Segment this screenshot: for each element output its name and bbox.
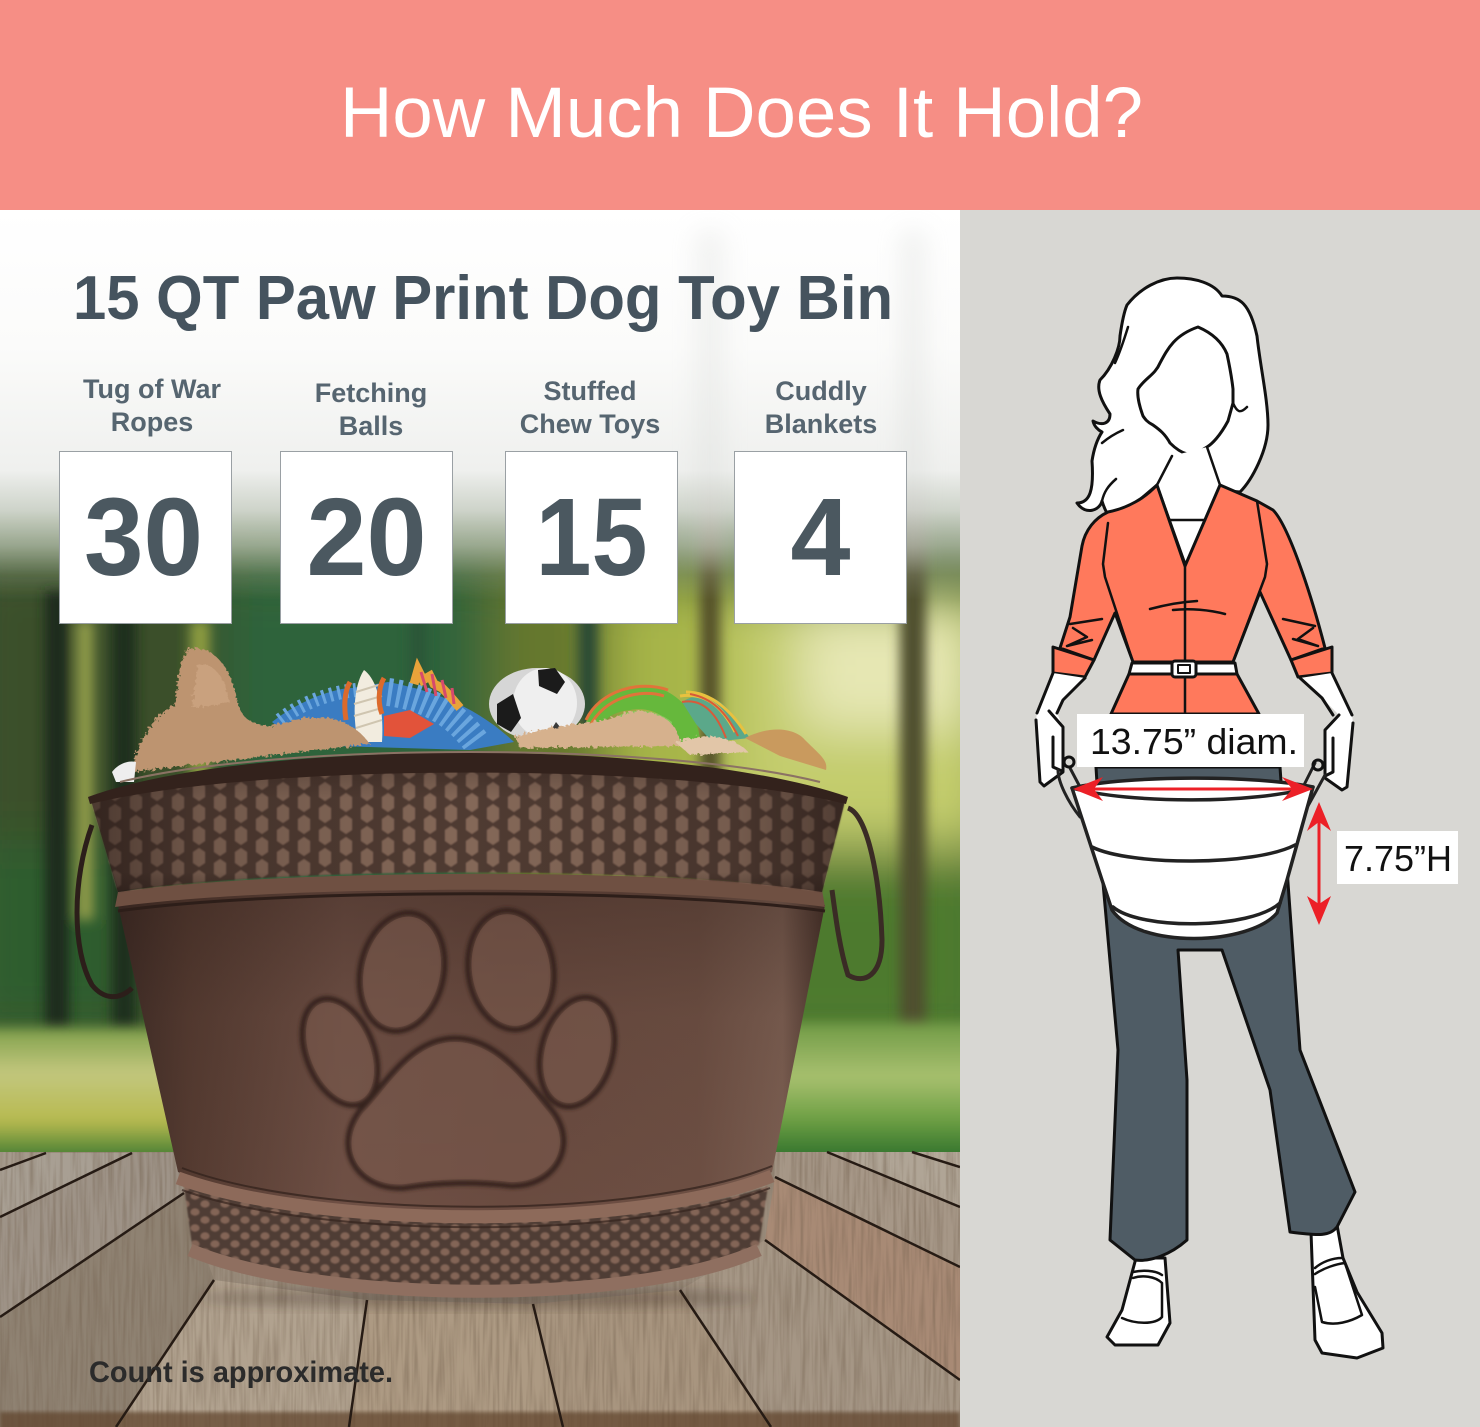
misty white fade [0,378,960,592]
bucket handle left [77,825,132,997]
count box: 20 [280,452,452,624]
label: 13.75 inch diameter [1077,714,1304,767]
heading: 15 QT Paw Print Dog Toy Bin: 15 QT Paw Print Dog Toy Bin [73,264,893,333]
face [1138,327,1233,454]
figure: woman holding bin [1036,278,1383,1358]
label: Cuddly Blankets: Blankets [765,409,877,439]
label: Tug of War Ropes: Ropes [111,407,193,437]
count box: 4: 4 [790,476,850,599]
bucket handle right [832,808,882,979]
icon: plush toy [132,648,748,772]
label: Cuddly Blankets: Cuddly [775,376,867,406]
icon: green ring and colored rope [586,686,750,742]
label: 13.75 inch diameter: 13.75” diam. [1090,721,1298,762]
icon: biscuit [112,730,826,782]
hair [1077,278,1268,523]
embossed paw print [287,905,626,1188]
count box: 30 [60,452,232,624]
panel: size comparison [960,210,1480,1427]
count box: 15 [506,452,678,624]
pants [1096,767,1355,1260]
label: Fetching Balls: Balls [339,411,403,441]
label: 7.75 inch height [1337,831,1458,884]
bucket rim [88,753,848,804]
hammered band [90,758,846,892]
header banner [0,0,1480,210]
icon: soccer ball [489,668,585,740]
belt [1129,661,1237,677]
arrow: diameter [1073,777,1313,801]
icon: blue rope [272,670,514,750]
label: Tug of War Ropes: Tug of War [83,374,221,404]
bucket ridge [115,874,825,907]
arrow: height [1307,802,1331,925]
count box: 30: 30 [84,476,203,599]
count box: 4 [734,452,906,624]
label: Stuffed Chew Toys: Chew Toys [520,409,660,439]
wooden deck [0,1152,960,1427]
bucket shadow [198,1288,758,1308]
shoes [1107,1225,1383,1358]
count box: 15: 15 [536,476,648,599]
note: count is approximate: Count is approximate. [89,1356,393,1389]
figure: bin outline [1058,757,1325,939]
title: How Much Does It Hold?: How Much Does It Hold? [340,74,1143,153]
bucket photo [77,752,882,1291]
count box: 20: 20 [306,476,426,599]
panel: outdoor photo background [0,210,1000,1427]
label: Stuffed Chew Toys: Stuffed [544,376,636,406]
bucket base band [178,1166,772,1291]
toys in the bin [112,648,826,782]
hands [1036,673,1353,790]
grass [0,1015,960,1152]
label: 7.75 inch height: 7.75”H [1344,838,1452,879]
label: Fetching Balls: Fetching [315,378,427,408]
bucket body [118,886,825,1212]
blouse [1053,485,1332,714]
icon: white chew bone and red toy [345,670,434,742]
